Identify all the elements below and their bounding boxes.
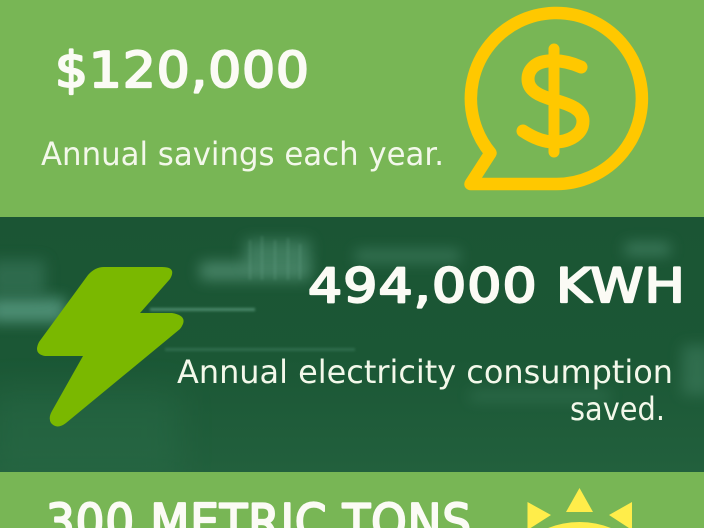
- panel: electricity: [0, 217, 704, 480]
- icon: lightning bolt: [37, 267, 184, 426]
- electricity description: [177, 353, 673, 428]
- electricity figure: 494,000 KWH: [308, 259, 686, 314]
- panel: savings: [0, 0, 704, 217]
- savings figure: $120,000: [55, 42, 310, 99]
- savings description: Annual savings each year.: [41, 135, 444, 173]
- panel: carbon: [0, 472, 704, 528]
- icon: sun: [494, 488, 664, 528]
- electricity description: Annual electricity consumption: [177, 353, 673, 391]
- icon: dollar speech bubble: [470, 13, 642, 184]
- electricity description: saved.: [570, 390, 665, 428]
- background photo: street scene: [0, 236, 704, 480]
